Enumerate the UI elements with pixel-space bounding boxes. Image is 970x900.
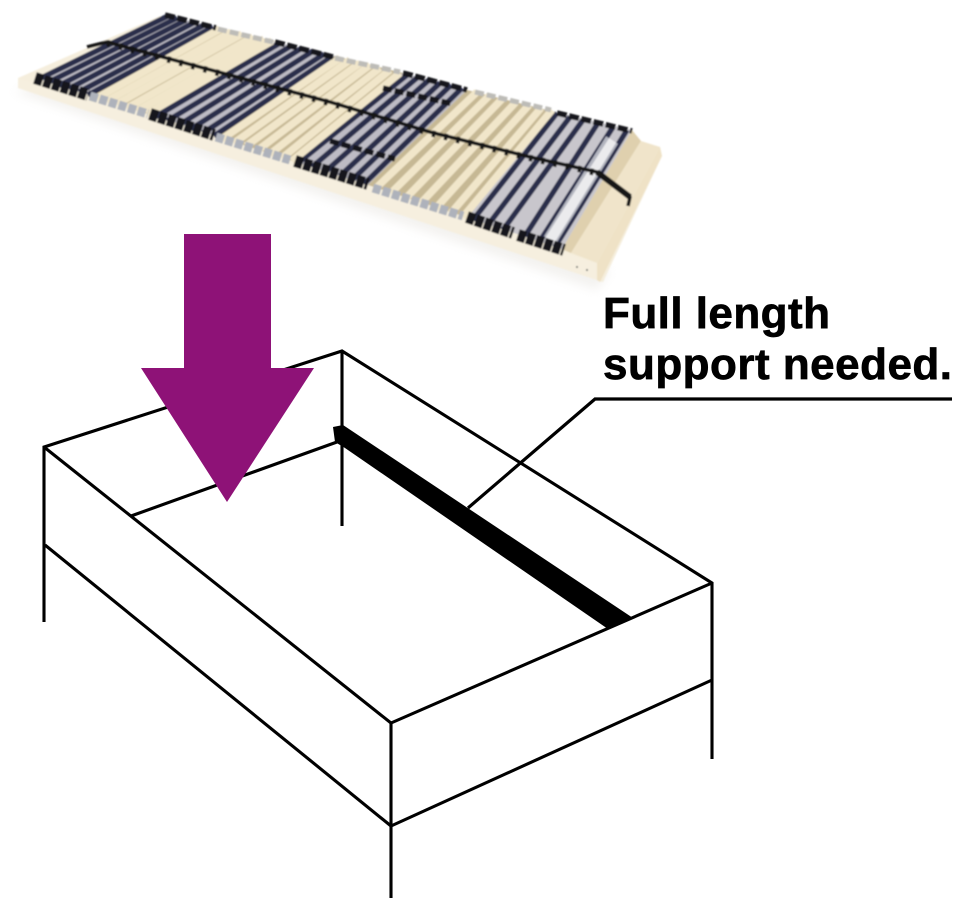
light wooden slats: [97, 29, 552, 217]
frame soft shadow: [14, 85, 610, 290]
dark flexible slats: [39, 16, 627, 247]
slat zone backgrounds: [36, 15, 632, 249]
central black belt: [87, 42, 630, 206]
leader line: [468, 399, 952, 508]
bed box line drawing: [44, 351, 712, 898]
mid-zone firmness adjusters: [330, 88, 453, 159]
black near slat end caps: [35, 78, 564, 250]
black far slat end caps: [165, 15, 632, 131]
purple down arrow: [141, 234, 314, 502]
callout text: Full length: [603, 289, 830, 338]
callout text: support needed.: [603, 340, 952, 389]
callout text: [603, 289, 952, 389]
black support beam: [333, 425, 633, 629]
wooden frame: [18, 16, 662, 282]
washed-out highlight on end slats: [550, 140, 612, 240]
grey slat end caps: [90, 96, 463, 216]
slatted bed base product photo: [14, 15, 662, 290]
far grey caps: [218, 29, 551, 110]
